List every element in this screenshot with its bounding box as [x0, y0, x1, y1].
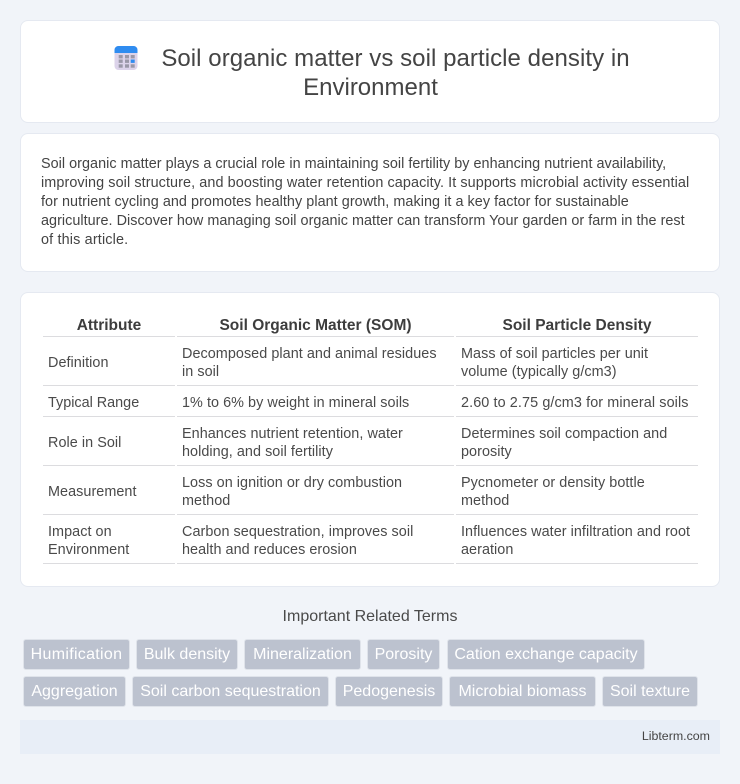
- title: Environment: [303, 74, 438, 101]
- row: typical range: Typical Range: [48, 395, 139, 411]
- row: measurement: Measurement: [48, 484, 137, 500]
- intro paragraph card: [20, 133, 720, 272]
- related term tags: [23, 639, 698, 707]
- row: definition: [48, 346, 648, 380]
- table header: soil organic matter: Soil Organic Matter (SOM): [219, 317, 412, 334]
- footer source label: Libterm.com: [642, 729, 710, 743]
- related term tags: Aggregation: [31, 683, 118, 700]
- intro paragraph: Soil organic matter plays a crucial role in maintaining soil fertility by enhancing nutrient availability,: [41, 156, 666, 172]
- row: impact on environment: Environment: [48, 542, 129, 558]
- related term tags: Porosity: [375, 646, 432, 663]
- heading: important related terms: Important Related Terms: [283, 608, 457, 625]
- table header: soil particle density: Soil Particle Density: [502, 317, 652, 334]
- header card: [20, 20, 720, 123]
- footer bar: [20, 720, 720, 754]
- row: role in soil: Role in Soil: [48, 435, 121, 451]
- row: measurement: method: [461, 493, 509, 509]
- row: measurement: Pycnometer or density bottle: [461, 475, 645, 491]
- row: role in soil: Determines soil compaction and: [461, 426, 667, 442]
- row: impact on environment: Carbon sequestration, improves soil: [182, 524, 413, 540]
- row: definition: in soil: [182, 364, 219, 380]
- related term tags: Humification: [31, 646, 122, 663]
- title: Soil organic matter vs soil particle density in: [161, 45, 630, 72]
- row: typical range: 1% to 6% by weight in mineral soils: [182, 395, 409, 411]
- row: measurement: method: [182, 493, 230, 509]
- intro paragraph: of this article.: [41, 232, 128, 248]
- related term tags: Cation exchange capacity: [454, 646, 638, 663]
- row: impact on environment: Influences water infiltration and root: [461, 524, 690, 540]
- row: impact on environment: aeration: [461, 542, 513, 558]
- row: measurement: [48, 475, 645, 509]
- row: role in soil: [48, 426, 667, 460]
- comparison table panel: [20, 292, 720, 587]
- table header: attribute: Attribute: [77, 317, 141, 334]
- row: role in soil: holding, and soil fertility: [182, 444, 333, 460]
- intro paragraph: [41, 156, 689, 248]
- row: definition: volume (typically g/cm3): [461, 364, 617, 380]
- row: impact on environment: health and reduces erosion: [182, 542, 357, 558]
- row: definition: Definition: [48, 355, 108, 371]
- related term tags: Mineralization: [253, 646, 352, 663]
- title: [161, 45, 630, 101]
- related term tags: Bulk density: [144, 646, 230, 663]
- intro paragraph: improving soil structure, and boosting water retention capacity. It supports microbial activity essential: [41, 175, 689, 191]
- related term tags: Pedogenesis: [343, 683, 435, 700]
- intro paragraph: agriculture. Discover how managing soil organic matter can transform Your garden or farm in the rest: [41, 213, 685, 229]
- row: definition: Decomposed plant and animal residues: [182, 346, 437, 362]
- related term tags: Soil texture: [610, 683, 690, 700]
- row: typical range: 2.60 to 2.75 g/cm3 for mineral soils: [461, 395, 689, 411]
- row: impact on environment: [48, 524, 690, 558]
- row: measurement: Loss on ignition or dry combustion: [182, 475, 402, 491]
- row: role in soil: porosity: [461, 444, 512, 460]
- row: definition: Mass of soil particles per unit: [461, 346, 648, 362]
- intro paragraph: for nutrient cycling and promotes healthy plant growth, making it a key factor for sustainable: [41, 194, 629, 210]
- row: typical range: [48, 395, 689, 411]
- row: impact on environment: Impact on: [48, 524, 112, 540]
- row: role in soil: Enhances nutrient retention, water: [182, 426, 403, 442]
- related term tags: Microbial biomass: [458, 683, 587, 700]
- icon: calendar: [114, 46, 138, 70]
- related term tags: Soil carbon sequestration: [140, 683, 321, 700]
